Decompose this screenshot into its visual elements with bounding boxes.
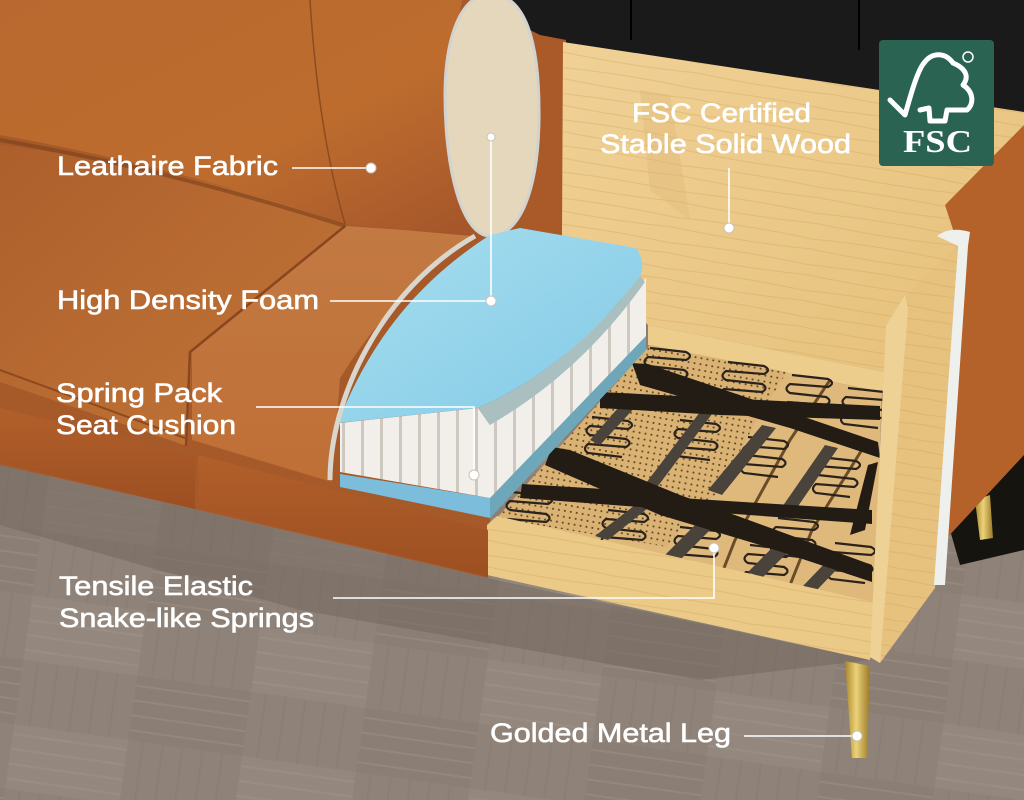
label: Tensile Elastic Snake-like Springs: Tensile Elastic — [59, 571, 253, 601]
panel: wooden back frame — [562, 42, 1024, 392]
panel: spring deck — [497, 345, 888, 602]
icon: FSC logo — [879, 40, 994, 166]
right leg — [975, 495, 993, 540]
foam bottom — [340, 335, 646, 518]
pocket springs side — [490, 278, 646, 498]
label: Spring Pack Seat Cushion: Spring Pack — [56, 378, 223, 408]
sofa backing — [0, 0, 566, 578]
label: Spring Pack Seat Cushion — [56, 378, 479, 480]
label: Tensile Elastic Snake-like Springs — [59, 543, 719, 633]
sofa back orange edge — [522, 35, 566, 235]
label: Leathaire Fabric — [57, 151, 376, 181]
fabric bands — [590, 400, 842, 592]
panel: seat cushions — [0, 145, 475, 482]
cork slats — [497, 345, 787, 547]
foam side — [478, 276, 645, 425]
label: Tensile Elastic Snake-like Springs: Snake-like Springs — [59, 603, 314, 633]
label: Spring Pack Seat Cushion: Seat Cushion — [56, 410, 236, 440]
label: High Density Foam: High Density Foam — [57, 285, 319, 315]
background: dark wall cabinet — [450, 0, 1024, 565]
panel: front wooden rail — [487, 516, 874, 660]
pocket springs front — [340, 408, 490, 498]
background: carpet floor — [0, 440, 1024, 800]
label: FSC Certified Stable Solid Wood — [600, 98, 851, 233]
panel: front arm panel — [870, 230, 970, 663]
label: Golded Metal Leg: Golded Metal Leg — [490, 718, 731, 748]
right arm outer — [945, 122, 1024, 540]
far shadow on carpet — [0, 465, 870, 680]
label: FSC Certified Stable Solid Wood: Stable Solid Wood — [600, 129, 851, 159]
icon: golden metal leg — [845, 661, 870, 758]
panel: back pillow — [0, 0, 472, 236]
label: Golded Metal Leg — [490, 718, 862, 748]
pillow end beige — [445, 0, 539, 236]
icon: FSC logo: FSC — [903, 123, 972, 159]
white trim strip — [934, 230, 970, 585]
slat gaps — [722, 380, 868, 585]
label: High Density Foam — [57, 133, 496, 315]
black webbing straps — [520, 363, 880, 582]
panel: spring pack and foam cut-away — [330, 228, 646, 518]
registered mark — [963, 52, 973, 62]
label: FSC Certified Stable Solid Wood: FSC Certified — [632, 98, 811, 128]
foam top — [338, 228, 642, 423]
label: Leathaire Fabric: Leathaire Fabric — [57, 151, 278, 181]
panel: orange front rails — [0, 408, 488, 577]
snake springs — [505, 348, 888, 585]
